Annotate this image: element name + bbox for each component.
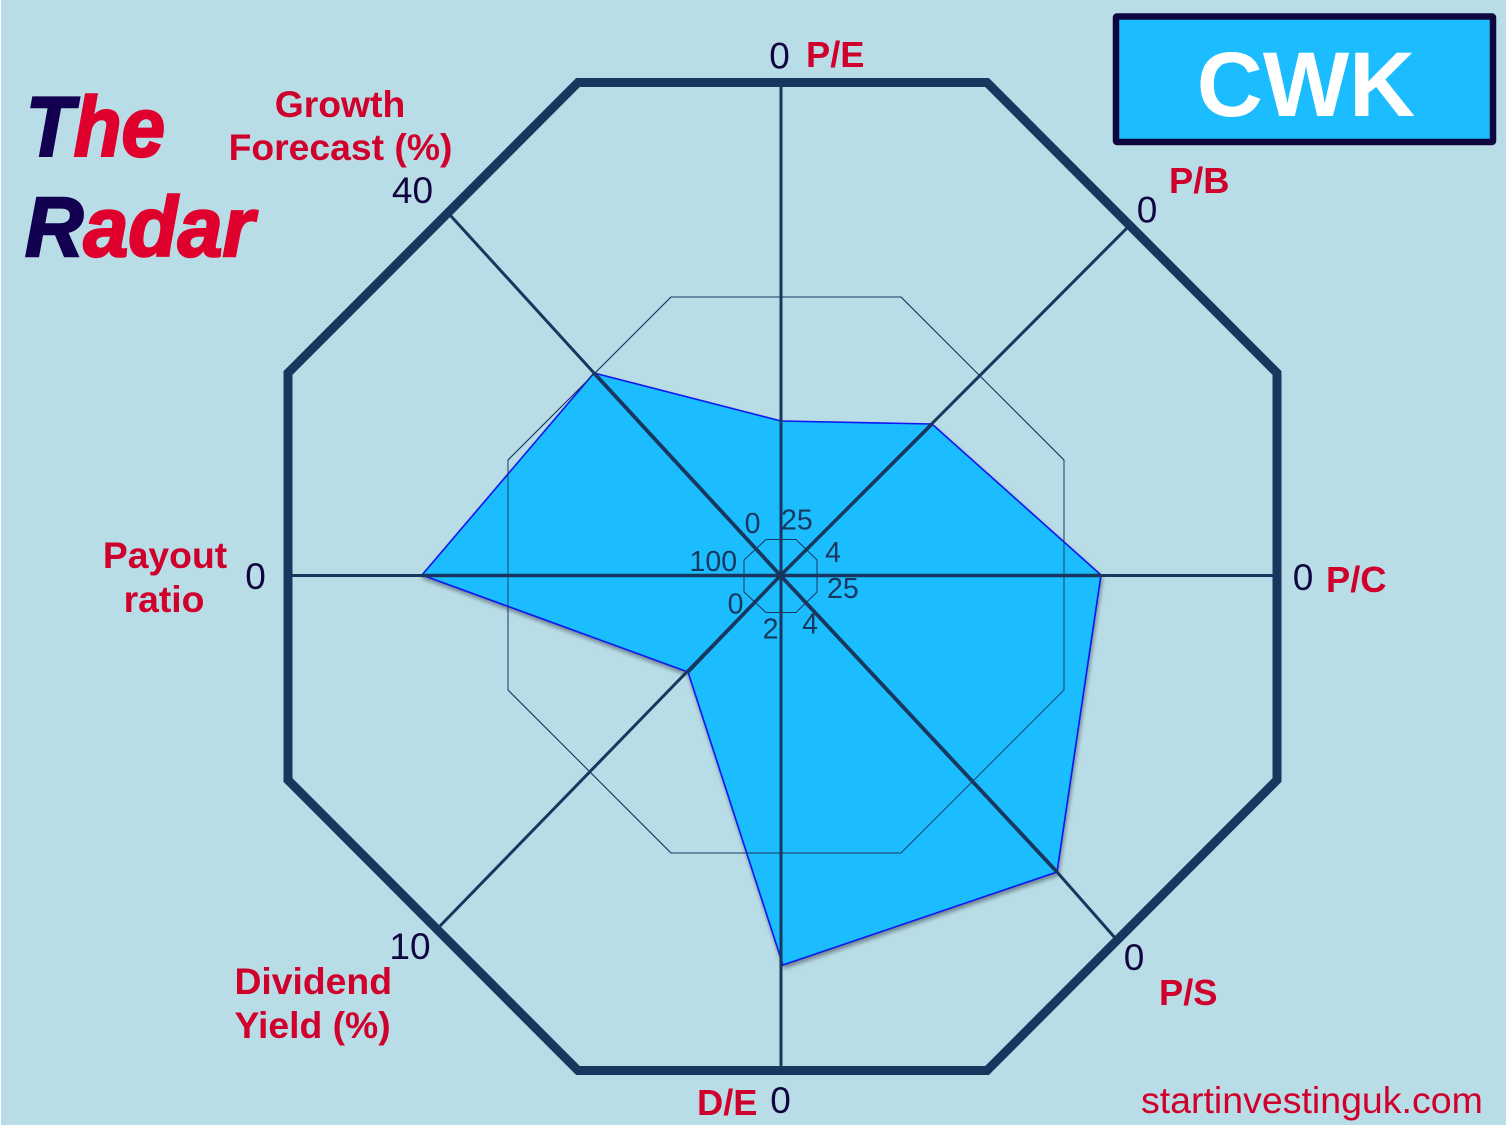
axis label: Growth Forecast xyxy=(229,83,452,168)
inner scale values xyxy=(690,504,859,646)
axis label: P/S: P/S xyxy=(1159,972,1218,1013)
inner scale values: 25 xyxy=(781,504,813,536)
axis label: Dividend Yield xyxy=(234,960,392,1046)
middle octagon xyxy=(508,297,1064,853)
axis label: P/B: P/B xyxy=(1169,160,1230,201)
outer scale values: 0 xyxy=(1124,937,1144,978)
axis label: Payout ratio: ratio xyxy=(124,578,204,620)
website credit: startinvestinguk.com xyxy=(1141,1079,1483,1121)
inner scale values: 25 xyxy=(827,573,859,605)
inner scale values: 0 xyxy=(728,588,743,620)
axis label: P/C: P/C xyxy=(1326,559,1387,600)
axis label: Payout ratio xyxy=(103,534,227,620)
inner octagon xyxy=(744,540,817,612)
title: The Radar: Radar xyxy=(25,180,258,274)
outer scale values: 40 xyxy=(392,170,433,211)
ticker box: CWK: CWK xyxy=(1197,34,1415,136)
outer scale values: 0 xyxy=(770,1080,791,1121)
data polygon xyxy=(422,373,1101,965)
outer scale values: 0 xyxy=(769,36,790,76)
title: The Radar xyxy=(25,80,258,274)
outer scale values: 10 xyxy=(389,926,431,967)
axis label: Payout ratio: Payout xyxy=(103,534,227,576)
axis spokes xyxy=(288,83,1274,1070)
title: The Radar: The xyxy=(26,80,165,174)
axis label: Growth Forecast: Growth xyxy=(275,83,405,125)
inner scale values: 4 xyxy=(825,537,841,569)
inner scale values: 0 xyxy=(745,508,760,540)
axis label: Dividend Yield: Yield (%) xyxy=(234,1004,391,1046)
inner scale values: 2 xyxy=(763,614,778,646)
outer scale values: 0 xyxy=(1293,557,1313,598)
axis label: Growth Forecast: Forecast (%) xyxy=(229,126,452,168)
outer octagon xyxy=(288,82,1277,1070)
axis label: Dividend Yield: Dividend xyxy=(234,960,392,1002)
inner scale values: 4 xyxy=(802,608,818,640)
ticker box: CWK xyxy=(1116,16,1493,142)
axis label: D/E: D/E xyxy=(697,1082,758,1123)
inner scale values: 100 xyxy=(690,546,737,578)
axis label: P/E: P/E xyxy=(806,34,865,75)
outer scale values xyxy=(245,36,1313,1121)
middle octagon over data xyxy=(508,297,1064,853)
outer scale values: 0 xyxy=(1137,190,1157,230)
radar chart xyxy=(245,36,1313,1121)
outer scale values: 0 xyxy=(245,556,266,597)
